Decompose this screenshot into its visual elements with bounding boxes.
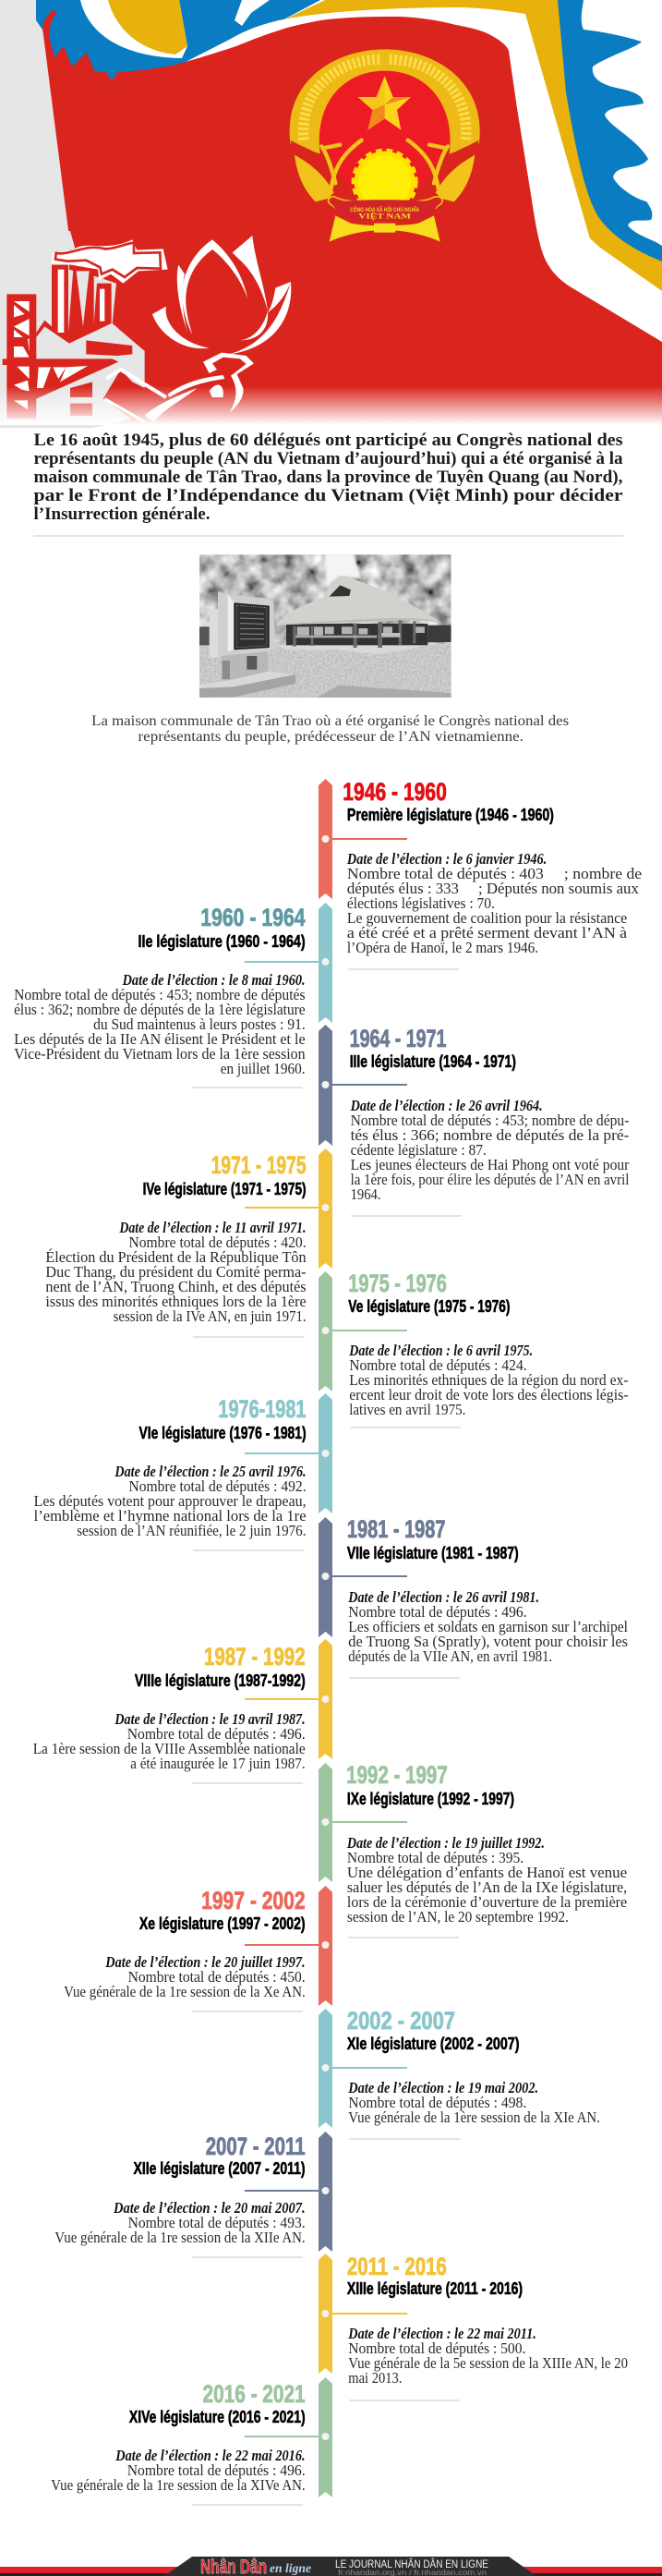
election details: Duc Thang, du président du Comité perma-	[45, 1263, 307, 1281]
timeline entry: 2007-2011	[54, 2132, 332, 2258]
election details	[347, 2325, 628, 2387]
election details: ercent leur droit de vote lors des élections légis-	[349, 1386, 628, 1403]
election details: lors de la cérémonie d’ouverture de la première	[347, 1893, 627, 1911]
election details: session de l’AN, le 20 septembre 1992.	[347, 1908, 569, 1926]
election details: Date de l’élection : le 19 avril 1987.	[114, 1710, 306, 1728]
election details	[64, 1953, 306, 2000]
legislature title: VIIIe législature (1987-1992)	[135, 1671, 306, 1690]
election details: Date de l’élection : le 11 avril 1971.	[119, 1219, 307, 1236]
timeline segment	[245, 903, 332, 1023]
election details: Date de l’élection : le 20 mai 2007.	[113, 2199, 306, 2217]
emblem name: VIỆT NAM	[358, 212, 411, 221]
timeline entry: 2011-2016	[319, 2253, 628, 2401]
timeline entry: 1997-2002	[64, 1886, 332, 2012]
election details: Date de l’élection : le 26 avril 1981.	[347, 1588, 539, 1606]
timeline segment	[245, 1886, 332, 2006]
period heading: 2011 - 2016	[347, 2253, 447, 2280]
flag border: yellow band	[279, 0, 662, 296]
timeline entry: 1981-1987	[319, 1515, 628, 1679]
election details: Date de l’élection : le 25 avril 1976.	[114, 1463, 307, 1480]
election details: 1964.	[351, 1185, 380, 1203]
period heading: 1975 - 1976	[348, 1270, 447, 1297]
period heading: 1987 - 1992	[204, 1643, 306, 1671]
timeline entry: 1971-1975	[45, 1148, 332, 1338]
election details: mai 2013.	[348, 2369, 402, 2387]
intro paragraph: Le 16 août 1945, plus de 60 délégués ont participé au Congrès national des	[33, 431, 622, 450]
intro paragraph: maison communale de Tân Trao, dans la province de Tuyên Quang (au Nord),	[33, 468, 623, 487]
election details	[346, 850, 642, 956]
election details: Date de l’élection : le 6 avril 1975.	[348, 1342, 533, 1359]
election details: Vue générale de la 5e session de la XIIIe AN, le 20	[348, 2354, 628, 2372]
election details: Nombre total de députés : 498.	[348, 2094, 526, 2111]
election details: du Sud maintenus à leurs postes : 91.	[93, 1015, 306, 1033]
red flag field	[42, 9, 662, 425]
election details: cédente législature : 87.	[351, 1141, 487, 1159]
election details: a été créé et a prêté serment devant l’AN à	[347, 924, 628, 942]
election details: Nombre total de députés : 496.	[348, 1603, 527, 1621]
icon: national emblem	[290, 49, 480, 242]
legislature title: XIVe législature (2016 - 2021)	[129, 2408, 306, 2426]
legislature title: Xe législature (1997 - 2002)	[139, 1914, 306, 1933]
election details: latives en avril 1975.	[349, 1401, 465, 1418]
election details: Nombre total de députés : 395.	[347, 1849, 524, 1866]
election details: Nombre total de députés : 493.	[128, 2214, 306, 2231]
chimneys and roofline	[36, 265, 112, 344]
intro paragraph: représentants du peuple (AN du Vietnam d’aujourd’hui) qui a été organisé à la	[33, 449, 623, 468]
legislature title: IIe législature (1960 - 1964)	[138, 932, 306, 951]
election details: Date de l’élection : le 22 mai 2016.	[114, 2447, 306, 2464]
election details: Nombre total de députés : 420.	[129, 1233, 307, 1251]
election details	[348, 1342, 628, 1418]
election details: Vue générale de la 1ère session de la XIe AN.	[348, 2108, 600, 2126]
election details: Vue générale de la 1re session de la XIIe AN.	[54, 2229, 306, 2246]
election details: Nombre total de députés : 424.	[349, 1356, 527, 1374]
timeline segment	[245, 1639, 332, 1759]
election details: la 1ère fois, pour élire les députés de l’AN en avril	[351, 1171, 630, 1188]
hero banner: flag with emblem	[0, 0, 662, 428]
election details: l’emblème et l’hymne national lors de la 1re	[34, 1507, 307, 1525]
election details	[34, 1463, 307, 1539]
timeline segment	[319, 2009, 407, 2128]
period heading: 1992 - 1997	[346, 1761, 448, 1789]
timeline segment	[245, 2132, 332, 2252]
election details	[54, 2199, 306, 2246]
period heading: 1971 - 1975	[211, 1151, 307, 1179]
election details: en juillet 1960.	[221, 1060, 306, 1077]
smoke	[52, 239, 168, 284]
election details: La 1ère session de la VIIIe Assemblée nationale	[33, 1740, 306, 1757]
election details: Nombre total de députés : 453; nombre de députés	[14, 986, 306, 1003]
timeline segment	[319, 1025, 407, 1146]
intro paragraph: l’Insurrection générale.	[33, 504, 211, 524]
election details	[347, 2079, 600, 2126]
icon: lotus flower	[145, 236, 291, 422]
footer title: LE JOURNAL NHÂN DÂN EN LIGNE	[335, 2558, 488, 2570]
timeline entry: 2002-2007	[319, 2007, 600, 2140]
photo caption	[91, 713, 569, 745]
period heading: 1946 - 1960	[343, 778, 447, 806]
period heading: 1981 - 1987	[347, 1515, 445, 1543]
election details: tés élus : 366; nombre de députés de la pré-	[351, 1126, 629, 1144]
election details: Les officiers et soldats en garnison sur l’archipel	[348, 1618, 628, 1635]
election details	[51, 2447, 306, 2494]
election details: Vue générale de la 1re session de la XIVe AN.	[51, 2476, 306, 2494]
election details: Date de l’élection : le 19 juillet 1992.	[346, 1834, 545, 1852]
timeline segment	[245, 1148, 332, 1269]
legislature title: IIIe législature (1964 - 1971)	[350, 1052, 516, 1071]
legislature title: Première législature (1946 - 1960)	[347, 806, 554, 824]
flag border: top-left blue flames	[36, 0, 320, 83]
election details: Les députés votent pour approuver le drapeau,	[34, 1492, 307, 1510]
election details: Nombre total de députés : 453; nombre de dépu-	[351, 1112, 629, 1129]
election details	[45, 1219, 307, 1325]
election details: session de la IVe AN, en juin 1971.	[114, 1307, 307, 1325]
election details: élus : 362; nombre de députés de la 1ère législature	[14, 1001, 306, 1018]
election details: Élection du Président de la République Tôn	[45, 1248, 307, 1266]
photo caption: La maison communale de Tân Trao où a été organisé le Congrès national des	[91, 713, 569, 729]
timeline segment	[245, 1393, 332, 1513]
legislature title: XIIIe législature (2011 - 2016)	[347, 2279, 523, 2298]
period heading: 1964 - 1971	[350, 1025, 446, 1052]
timeline segment	[319, 779, 407, 899]
flag border: white band	[186, 7, 662, 349]
election details: Nombre total de députés : 500.	[348, 2339, 525, 2357]
election details: Les jeunes électeurs de Hai Phong ont voté pour	[351, 1156, 630, 1173]
election details: Date de l’élection : le 8 mai 1960.	[122, 971, 306, 989]
timeline entry: 1946-1960	[319, 778, 642, 970]
intro paragraph	[33, 431, 623, 524]
election details: issus des minorités ethniques lors de la 1ère	[45, 1293, 307, 1310]
legislature title: VIe législature (1976 - 1981)	[138, 1424, 307, 1442]
election details: Les députés de la IIe AN élisent le Président et le	[14, 1030, 306, 1048]
election details: l’Opéra de Hanoï, le 2 mars 1946.	[347, 939, 538, 956]
election details: Date de l’élection : le 26 avril 1964.	[350, 1097, 543, 1114]
timeline entry: 1975-1976	[319, 1270, 628, 1428]
period heading: 1960 - 1964	[200, 904, 306, 931]
election details: nent de l’AN, Truong Chinh, et des députés	[45, 1278, 307, 1295]
period heading: 1997 - 2002	[201, 1887, 306, 1914]
election details: Date de l’élection : le 6 janvier 1946.	[346, 850, 547, 868]
election details	[347, 1588, 628, 1665]
timeline entry: 1964-1971	[319, 1025, 630, 1217]
footer bar	[0, 2557, 662, 2576]
election details: Nombre total de députés : 403 ; nombre de	[347, 865, 642, 882]
timeline segment	[319, 1271, 407, 1391]
election details: Date de l’élection : le 19 mai 2002.	[347, 2079, 538, 2096]
timeline entry: 2016-2021	[51, 2377, 332, 2506]
period heading: 2002 - 2007	[347, 2007, 455, 2035]
election details	[14, 971, 306, 1077]
election details: Nombre total de députés : 450.	[128, 1968, 306, 1986]
election details: Le gouvernement de coalition pour la résistance	[347, 909, 627, 927]
timeline entry: 1976-1981	[34, 1393, 332, 1551]
timeline entry: 1960-1964	[14, 903, 332, 1088]
period heading: 1976-1981	[218, 1395, 307, 1423]
election details	[350, 1097, 630, 1203]
election details: députés élus : 333 ; Députés non soumis aux	[347, 880, 640, 897]
legislature title: IXe législature (1992 - 1997)	[347, 1790, 514, 1808]
election details: Vice-Président du Vietnam lors de la 1ère session	[14, 1045, 306, 1063]
election details	[346, 1834, 627, 1926]
election details: de Truong Sa (Spratly), votent pour choisir les	[348, 1633, 628, 1650]
election details: Date de l’élection : le 22 mai 2011.	[347, 2325, 536, 2342]
election details: Date de l’élection : le 20 juillet 1997.	[104, 1953, 306, 1971]
election details: Nombre total de députés : 492.	[129, 1477, 307, 1495]
flag border: right blue flames	[554, 0, 662, 268]
timeline segment	[319, 2254, 407, 2374]
icon: factory and oil rig	[0, 231, 168, 428]
legislature title: Ve législature (1975 - 1976)	[348, 1297, 510, 1316]
photo: Tan Trao communal house	[199, 554, 451, 698]
footer logo suffix: en ligne	[270, 2562, 311, 2576]
election details: Nombre total de députés : 496.	[127, 2461, 306, 2479]
election details	[33, 1710, 306, 1772]
timeline segment	[319, 1763, 407, 1882]
election details: députés de la VIIe AN, en avril 1981.	[348, 1647, 552, 1665]
election details: a été inaugurée le 17 juin 1987.	[130, 1755, 306, 1772]
legislature title: VIIe législature (1981 - 1987)	[347, 1544, 519, 1562]
election details: Vue générale de la 1re session de la Xe AN.	[64, 1983, 306, 2000]
election details: élections législatives : 70.	[347, 894, 495, 912]
election details: Une délégation d’enfants de Hanoï est venue	[347, 1864, 627, 1881]
hero fade	[0, 386, 662, 425]
legislature title: IVe législature (1971 - 1975)	[143, 1180, 307, 1198]
emblem motto: CỘNG HÒA XÃ HỘI CHỦ NGHĨA	[350, 205, 419, 213]
timeline segment	[245, 2377, 332, 2497]
timeline entry: 1992-1997	[319, 1761, 627, 1938]
legislature title: XIIe législature (2007 - 2011)	[133, 2159, 306, 2178]
period heading: 2016 - 2021	[203, 2380, 306, 2408]
election details: Nombre total de députés : 496.	[127, 1725, 306, 1743]
photo caption: représentants du peuple, prédécesseur de l’AN vietnamienne.	[138, 729, 524, 745]
oil rig tower	[3, 294, 118, 419]
intro paragraph: par le Front de l’Indépendance du Vietnam (Việt Minh) pour décider	[33, 486, 623, 505]
legislature title: XIe législature (2002 - 2007)	[347, 2035, 520, 2053]
timeline entry: 1987-1992	[33, 1639, 332, 1784]
election details: saluer les députés de l’An de la IXe législature,	[347, 1878, 627, 1896]
factory wall blocks	[86, 340, 132, 356]
election details: session de l’AN réunifiée, le 2 juin 1976.	[77, 1522, 307, 1539]
election details: Les minorités ethniques de la région du nord ex-	[349, 1371, 628, 1389]
timeline segment	[319, 1517, 407, 1637]
period heading: 2007 - 2011	[206, 2132, 306, 2160]
